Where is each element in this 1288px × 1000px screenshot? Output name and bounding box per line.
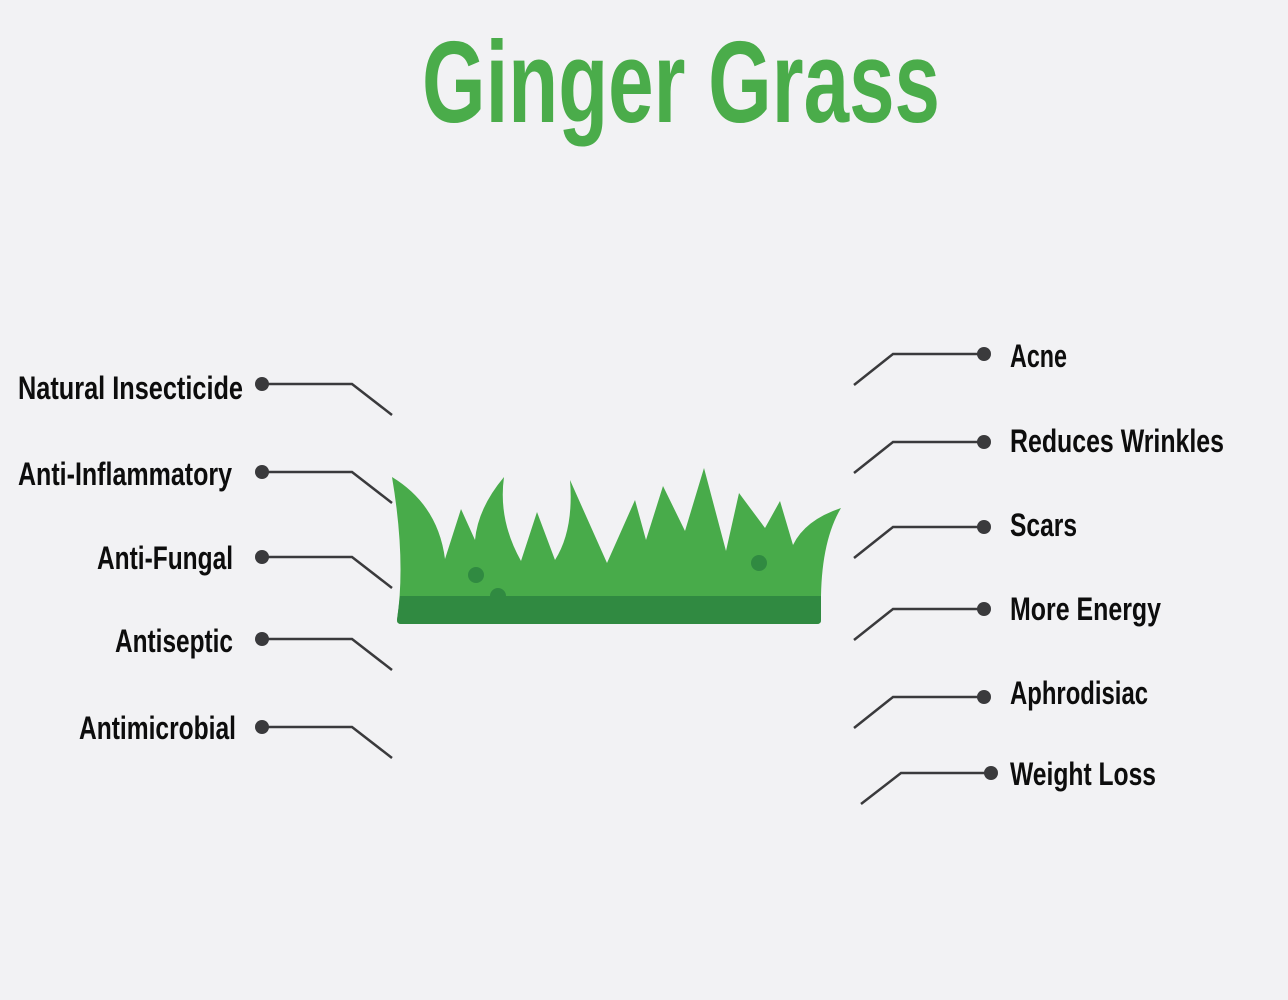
label: Anti-Fungal <box>97 540 392 588</box>
label: Antiseptic: Antiseptic <box>115 623 233 659</box>
label: Reduces Wrinkles: Reduces Wrinkles <box>1010 423 1224 459</box>
label: Scars: Scars <box>1010 507 1077 543</box>
label: Acne: Acne <box>1010 338 1067 374</box>
label: Antimicrobial <box>79 710 392 758</box>
label: Aphrodisiac <box>854 675 1148 728</box>
label: More Energy <box>854 591 1161 640</box>
label: Anti-Inflammatory <box>18 456 392 503</box>
label: Aphrodisiac: Aphrodisiac <box>1010 675 1148 711</box>
label: Weight Loss <box>861 756 1156 804</box>
label: Acne <box>854 338 1067 385</box>
label: Anti-Inflammatory: Anti-Inflammatory <box>18 456 232 492</box>
label: More Energy: More Energy <box>1010 591 1161 627</box>
label: Anti-Fungal: Anti-Fungal <box>97 540 233 576</box>
label: Natural Insecticide: Natural Insecticide <box>18 370 243 406</box>
left labels <box>18 370 392 758</box>
illustration: grass <box>392 468 841 624</box>
label: Antiseptic <box>115 623 392 670</box>
label: Reduces Wrinkles <box>854 423 1224 473</box>
label: Weight Loss: Weight Loss <box>1010 756 1156 792</box>
right labels <box>854 338 1224 804</box>
label: Scars <box>854 507 1077 558</box>
label: Natural Insecticide <box>18 370 392 415</box>
label: Antimicrobial: Antimicrobial <box>79 710 236 746</box>
title: Ginger Grass <box>422 17 940 147</box>
